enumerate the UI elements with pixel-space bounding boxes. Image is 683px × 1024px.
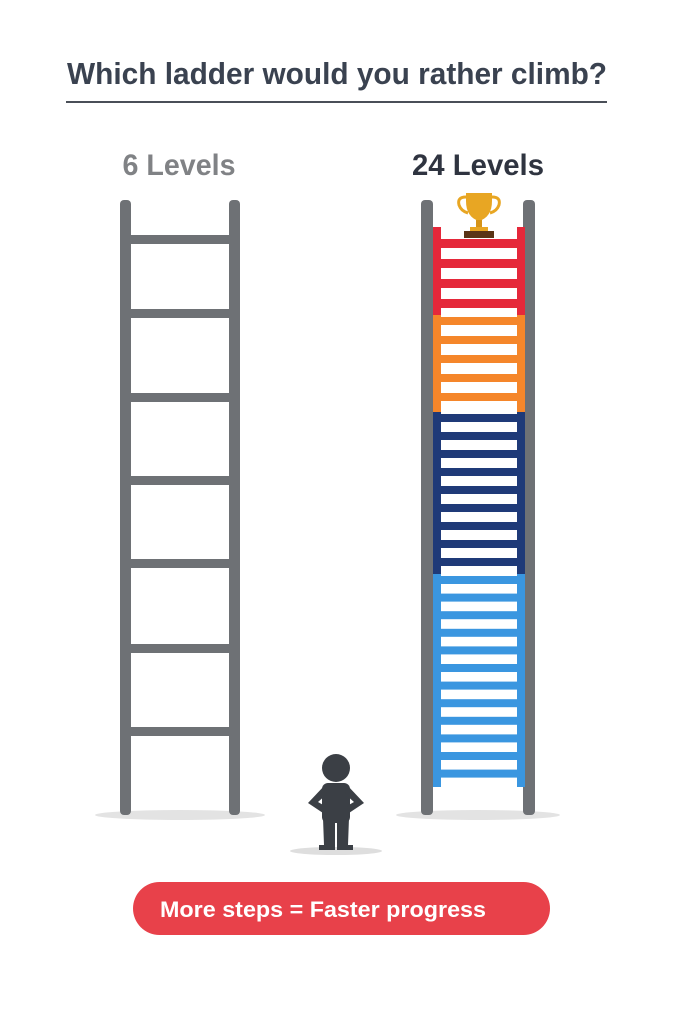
icon: person	[290, 754, 382, 855]
heading: 24 Levels: 24 Levels	[412, 149, 544, 182]
heading: 6 Levels: 6 Levels	[122, 149, 236, 182]
callout button	[133, 882, 550, 935]
section: navy	[433, 412, 525, 574]
title: Which ladder would you rather climb?	[67, 56, 607, 91]
left ladder	[95, 200, 265, 820]
section: red	[433, 227, 525, 315]
section: blue	[433, 574, 525, 787]
right ladder	[396, 200, 560, 820]
icon: trophy	[459, 193, 499, 238]
section: orange	[433, 315, 525, 412]
callout button: More steps = Faster progress	[160, 897, 486, 922]
